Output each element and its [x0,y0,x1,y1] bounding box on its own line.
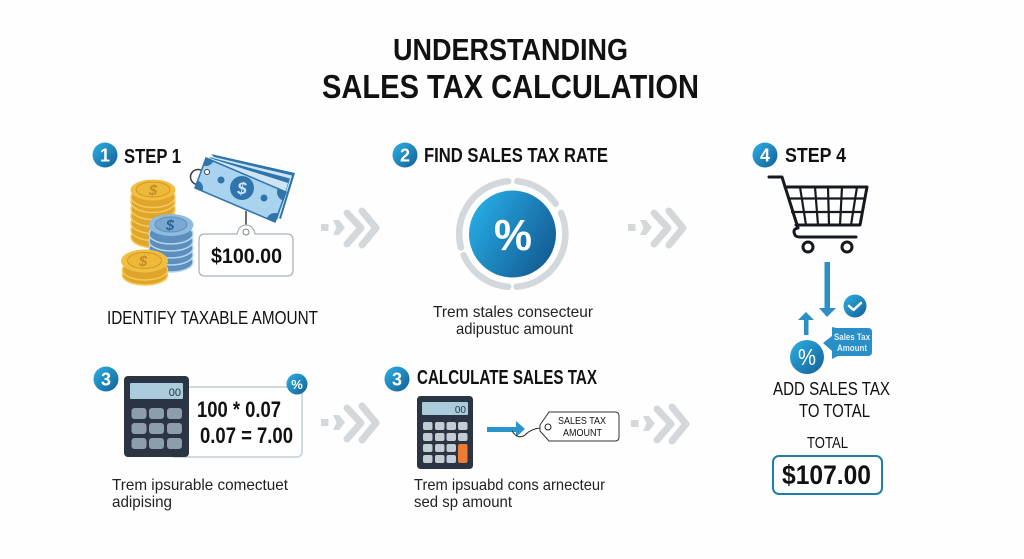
step 4 heading: STEP 4 [785,145,847,167]
arrow: calculate sales tax to step 4 [631,407,686,441]
icon: percent circle: % [798,344,816,370]
icon: coin stacks: $ [138,253,148,270]
icon: calculator [417,396,473,469]
icon: calculator: 00 [455,405,466,416]
step 2 badge: 2 [400,146,410,166]
icon: calculator: 00 [169,387,181,399]
title [322,32,699,105]
step 1 badge [92,142,118,168]
badge 3: 3 [392,370,402,390]
step 1 caption: IDENTIFY TAXABLE AMOUNT [107,308,318,328]
formula panel: 100 * 0.07 [197,397,281,422]
tag: sales tax amount: SALES TAX [558,415,606,427]
step 3 badge: 3 [101,370,111,390]
step 1 heading: STEP 1 [124,146,181,168]
callout: sales tax amount [823,327,872,359]
icon: shopping cart [769,177,867,252]
icon: coin stacks [121,180,194,285]
step 4 caption [773,379,890,421]
price tag [199,225,293,276]
formula panel [170,387,302,457]
arrow: to tag [487,421,525,437]
total value box: $107.00 [782,460,871,490]
step 4 badge [752,142,778,168]
step 3 badge [94,366,118,392]
step 1 badge: 1 [100,146,110,166]
step 2 caption: adipustuc amount [456,321,574,338]
callout: sales tax amount: Amount [837,343,867,353]
step 3 caption: Trem ipsurable comectuet [112,477,289,494]
step 3 caption: adipising [112,494,172,511]
icon: banknotes: $ [236,179,247,198]
caption [414,477,606,511]
arrow: down [819,262,836,317]
callout: sales tax amount: Sales Tax [834,332,870,342]
tag: sales tax amount: AMOUNT [563,427,602,439]
formula panel: 0.07 = 7.00 [200,423,293,448]
arrow: step 2 to step 4 [628,211,683,245]
step 3 caption [112,477,289,511]
icon: percent dial [459,181,565,287]
caption: Trem ipsuabd cons arnecteur [414,477,606,494]
step 2 heading: FIND SALES TAX RATE [424,145,608,167]
panel: calculate sales tax [384,366,619,511]
panel: step 3 calculation [94,366,308,511]
tag: sales tax amount [512,412,619,441]
arrow: up [798,312,814,335]
total label: TOTAL [807,435,848,452]
icon: coin stacks: $ [148,182,158,199]
icon: banknotes [190,154,295,224]
icon: percent circle [790,340,824,374]
panel: step 4 [752,142,890,494]
step 4 caption: ADD SALES TAX [773,379,890,399]
icon: percent badge: % [291,377,303,392]
icon: check badge [844,294,866,318]
icon: coin stacks: $ [165,217,175,234]
step 2 caption [433,304,594,338]
title: SALES TAX CALCULATION [322,68,699,105]
step 4 caption: TO TOTAL [799,401,870,421]
step 4 badge: 4 [760,146,770,166]
heading: CALCULATE SALES TAX [417,367,598,389]
icon: calculator [124,376,189,457]
panel: step 2 [392,142,608,338]
title: UNDERSTANDING [393,32,628,67]
badge 3 [384,366,410,392]
icon: percent badge [286,374,308,394]
caption: sed sp amount [414,494,513,511]
step 2 badge [392,142,418,168]
arrow: calculation to calculate sales tax [321,406,376,440]
panel: step 1 [92,142,318,328]
step 2 caption: Trem stales consecteur [433,304,594,321]
icon: percent dial: % [494,211,532,260]
price tag: $100.00 [211,245,282,268]
arrow: step 1 to step 2 [321,211,376,245]
